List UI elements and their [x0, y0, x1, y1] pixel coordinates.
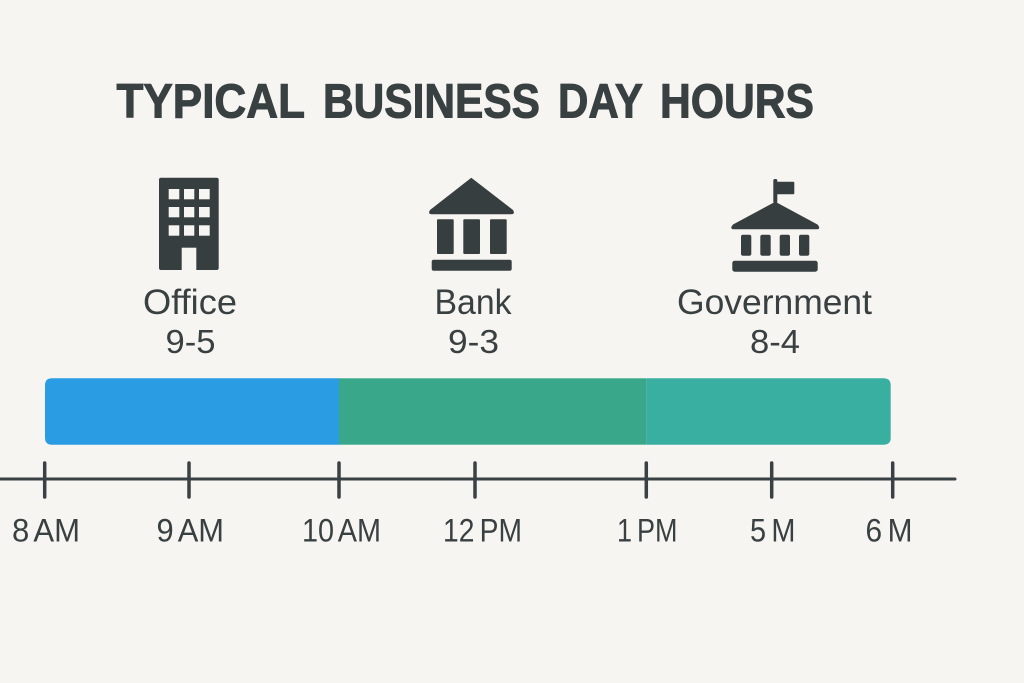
government hours: 8-4	[750, 323, 800, 360]
timeline bar	[45, 378, 891, 445]
bank hours: 9-3	[448, 323, 499, 360]
bar segment: bank green	[339, 378, 647, 445]
panel: government	[677, 179, 872, 360]
title: BUSINESS	[323, 74, 540, 128]
office label: Office	[143, 283, 237, 322]
axis labels: 5 M	[750, 512, 796, 548]
office hours: 9-5	[166, 323, 216, 360]
panel: office	[143, 178, 237, 360]
title	[116, 74, 814, 128]
axis labels: 8 AM	[12, 512, 80, 548]
axis labels: 12 PM	[443, 512, 522, 548]
bank label: Bank	[434, 283, 512, 322]
title: HOURS	[660, 74, 814, 128]
icon: government building	[731, 179, 819, 272]
government label: Government	[677, 283, 872, 322]
axis labels: 1 PM	[617, 512, 678, 548]
time axis	[0, 463, 955, 497]
bar segment: office blue	[45, 378, 339, 445]
bar segment: government teal	[647, 378, 891, 445]
axis labels	[12, 512, 912, 548]
panel: bank	[429, 178, 514, 360]
axis labels: 10 AM	[302, 512, 381, 548]
axis labels: 9 AM	[156, 512, 224, 548]
icon: bank	[429, 178, 514, 271]
axis labels: 6 M	[866, 512, 912, 548]
title: TYPICAL	[116, 74, 305, 128]
title: DAY	[558, 74, 643, 128]
icon: office building	[159, 178, 219, 270]
